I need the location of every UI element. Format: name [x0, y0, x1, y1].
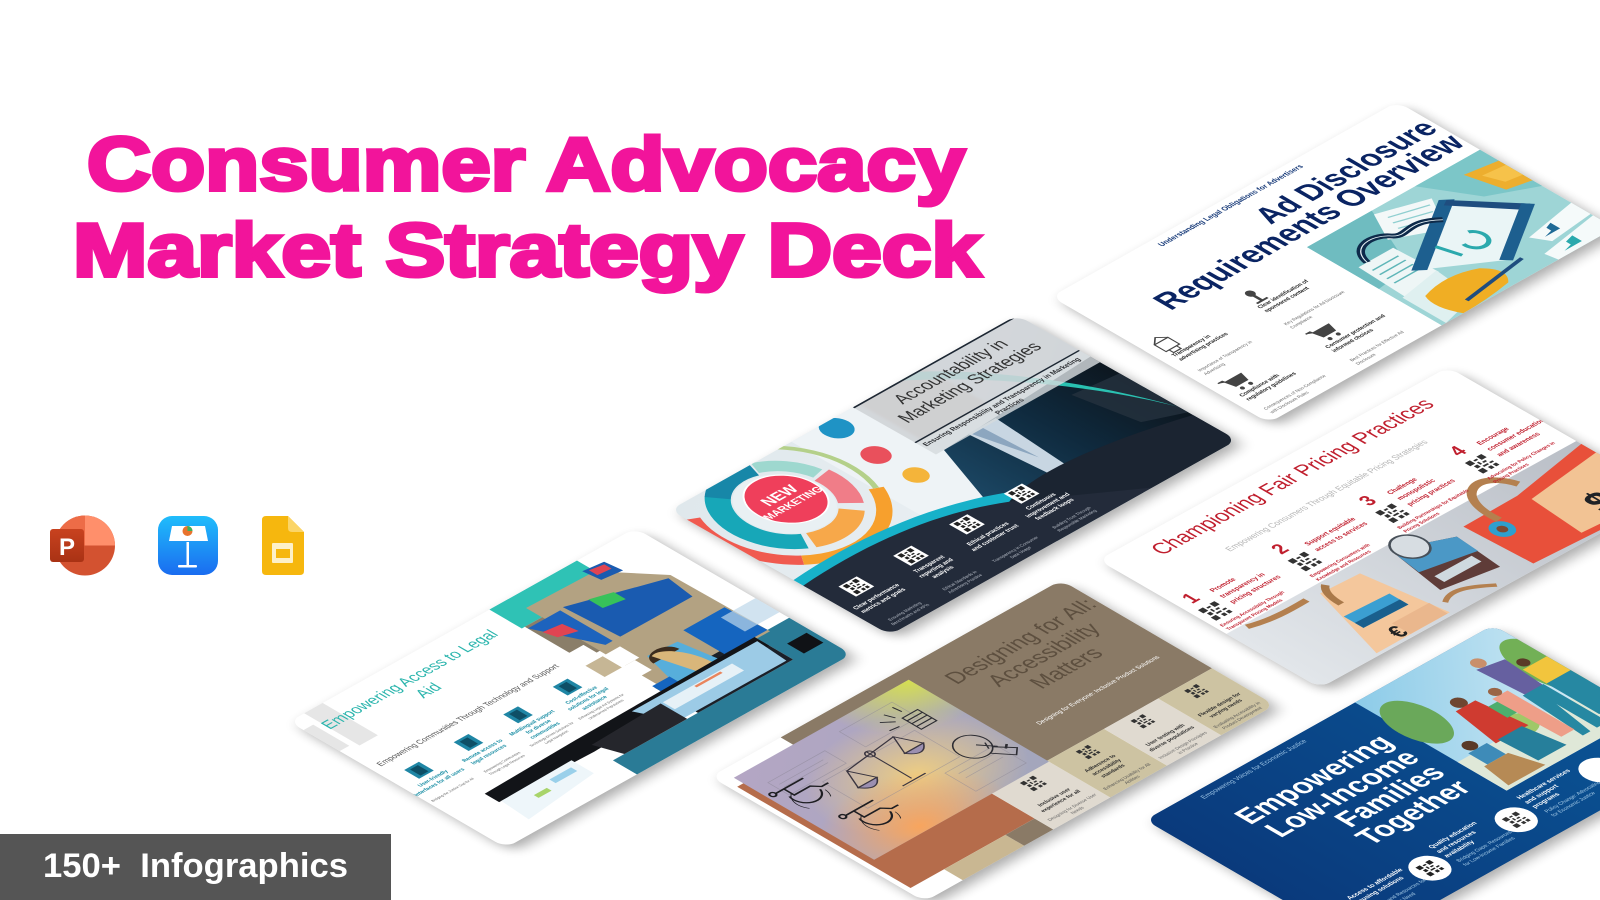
- item: multilingual: [489, 698, 580, 750]
- item: multilingual: for diverse: [525, 719, 553, 735]
- item: consumer protection: [1305, 314, 1404, 365]
- brown header block: [781, 580, 1212, 826]
- panel: Legal Aid slide: Aid: [411, 680, 446, 701]
- tile: flexible design: [1168, 675, 1268, 732]
- step 3: monopolistic: [1396, 478, 1438, 501]
- title: Accessibility: [980, 618, 1107, 690]
- tile: inclusive experience: Designing for Diverse User: [1046, 793, 1099, 822]
- item: access: Remote access to: [461, 738, 506, 763]
- item: multilingual: communities: [529, 721, 562, 740]
- item: multilingual: Multilingual support: [508, 709, 557, 737]
- item: education: and resources: [1435, 830, 1479, 854]
- illustration: families: [1351, 619, 1600, 793]
- swoosh: [900, 372, 1177, 406]
- step 1: Ensuring Accessibility Through: [1219, 590, 1287, 628]
- item: interface: User-friendly: [417, 769, 451, 788]
- photo: price tags: [1216, 435, 1600, 688]
- item: ethical practices: and customer trust: [969, 523, 1021, 552]
- navy wave footer: [794, 415, 1231, 632]
- item: interface: Bridging the Justice Gap for All: [430, 777, 475, 803]
- subtitle: Empowering Communities Through Technology and Support: [374, 662, 562, 768]
- step 2: access to services: [1313, 521, 1370, 553]
- tile: user testing: in Practice: [1177, 742, 1201, 755]
- step 4: Encourage: [1476, 426, 1512, 446]
- tile: standards: Adherence to: [1083, 754, 1119, 774]
- step 3: 3: [1354, 493, 1383, 509]
- panel: Low-Income Families slide: [1145, 619, 1600, 900]
- item: access: legal resources: [470, 744, 509, 766]
- item: sponsored: Compliance: [1289, 315, 1315, 330]
- item: sponsored: sponsored content: [1263, 286, 1311, 314]
- title: Families: [1328, 761, 1453, 832]
- icon: wheelchair: [838, 793, 917, 839]
- item: multilingual: Technology-Driven Solutions for: [529, 721, 576, 747]
- title: Accountability in: [888, 336, 1013, 407]
- tile: inclusive experience: [1002, 767, 1104, 825]
- tile: standards: [1057, 736, 1158, 794]
- item: healthcare: [1481, 765, 1600, 838]
- photo: lower monitors: [484, 632, 824, 820]
- tile: user testing: diverse populations: [1148, 725, 1197, 753]
- item: access: Through Legal Resources: [488, 754, 526, 776]
- title: Empowering: [1228, 731, 1402, 829]
- item: sponsored: [1244, 279, 1344, 328]
- item: transparent reporting: reporting and: [917, 557, 956, 579]
- item: healthcare: for Economic Justice: [1550, 791, 1598, 818]
- main title: Consumer Advocacy: [87, 122, 965, 206]
- item: transparent reporting: analysis: [930, 564, 957, 579]
- icon: scales: [831, 731, 951, 800]
- tile: inclusive experience: experience for all: [1040, 789, 1083, 814]
- item: education: for Low-Income Families: [1462, 836, 1517, 867]
- main title: [73, 122, 981, 292]
- item: performance metrics: Clear performance: [851, 582, 902, 611]
- subtitle: Designing for Everyone: Inclusive Product Solutions: [1035, 655, 1162, 726]
- item: healthcare: programs: [1531, 792, 1562, 809]
- step 2: [1272, 518, 1371, 581]
- subtitle: Ensuring Responsibility and Transparency in Marketing: [921, 356, 1083, 448]
- grey title band: Practices: [993, 397, 1026, 416]
- item: compliance: Consequences of Non-Compliance: [1262, 374, 1328, 411]
- title: Together: [1349, 776, 1479, 850]
- tile: standards: standards: [1100, 764, 1127, 779]
- item: interface: interfaces for all users: [413, 767, 467, 798]
- title: Designing for All:: [938, 595, 1103, 687]
- item: performance metrics: [838, 576, 930, 626]
- item: consumer protection: Disclosure: [1355, 353, 1378, 366]
- tile: flexible design: Product Development: [1221, 706, 1265, 730]
- item: compliance: Compliance with: [1238, 373, 1282, 398]
- step 3: Pricing Solutions: [1402, 512, 1442, 534]
- item: transparent reporting: Transparent: [912, 554, 947, 574]
- item: multilingual: Legal Navigation: [544, 730, 570, 745]
- tile: standards: accessibility: [1091, 758, 1124, 777]
- panel: Legal Aid slide: [289, 528, 859, 852]
- item: sponsored: Clear identification of: [1257, 279, 1311, 310]
- item: access: [454, 734, 525, 775]
- tile: user testing: User testing with: [1145, 723, 1188, 747]
- item: education: Bridging Gaps: Resources: [1455, 830, 1514, 863]
- grey title band: [853, 315, 1100, 454]
- item: ethical practices: Ethical practices: [965, 521, 1012, 547]
- item: housing: Access to affordable: [1345, 867, 1405, 900]
- item: continuous improvement: improvement and: [1024, 492, 1072, 519]
- item: continuous improvement: Responsible Marketing: [1056, 509, 1098, 532]
- tile: standards: Enhancing Usability for All: [1102, 762, 1153, 791]
- colour tiles: [900, 668, 1275, 880]
- title: Empowering Access to Legal: [317, 627, 503, 732]
- item: ethical practices: Data Usage: [1009, 545, 1033, 559]
- badge: infographics count: [0, 834, 391, 900]
- item: continuous improvement: [1004, 484, 1098, 532]
- item: education: [1395, 815, 1521, 887]
- tile: inclusive experience: Needs: [1069, 806, 1087, 815]
- item: transparency: Advertising: [1202, 362, 1227, 376]
- tile: flexible design: varying needs: [1208, 699, 1245, 719]
- step 1: [1183, 573, 1284, 630]
- grey title band: Marketing Strategies: [893, 339, 1046, 426]
- chart: marketing wheel: NEW: [757, 483, 803, 509]
- photo: office: [504, 535, 828, 720]
- title: [938, 595, 1148, 714]
- item: transparent reporting: Advertising Practice: [946, 573, 984, 594]
- icon: burst and bars: [870, 701, 937, 739]
- step 2: Empowering Consumers with: [1309, 543, 1372, 578]
- badge: infographics count: 150+ Infographics: [43, 847, 348, 885]
- panel: Accountability slide: [675, 318, 1246, 640]
- title: Low-Income: [1258, 746, 1428, 842]
- step 2: Support equitable: [1303, 516, 1358, 547]
- item: cost-effective: Enhancing Legal Aid Systems for: [577, 693, 626, 720]
- item: transparency: [1153, 332, 1252, 376]
- step 3: Building Partnerships for Equitable: [1396, 489, 1471, 530]
- item: education: availability: [1442, 839, 1477, 859]
- step 4: 4: [1445, 443, 1473, 460]
- item: compliance: regulatory guidelines: [1245, 372, 1298, 402]
- panel: Ad Disclosure slide: [1051, 102, 1600, 427]
- step 3: pricing practices: [1406, 478, 1458, 507]
- item: compliance: with Disclosure Rules: [1268, 390, 1312, 415]
- title: Ad Disclosure: [1246, 116, 1446, 229]
- subtitle: Empowering Voices for Economic Justice: [1199, 739, 1309, 800]
- step 1: Promote: [1209, 577, 1238, 593]
- step 1: 1: [1178, 591, 1206, 607]
- item: transparent reporting: [893, 546, 982, 594]
- step 3: Challenge: [1386, 477, 1420, 496]
- item: cost-effective: [538, 670, 631, 723]
- step 4: and awareness: [1495, 431, 1543, 458]
- checker squares: [569, 644, 652, 677]
- photo: suit: [944, 356, 1231, 541]
- step 1: transparency in: [1219, 572, 1267, 599]
- illustration: analytics artwork: [1307, 150, 1600, 325]
- tile: user testing: Inclusive Design Principles: [1157, 730, 1210, 760]
- item: education: Quality education: [1427, 821, 1479, 850]
- icons: floating chips: [818, 418, 930, 483]
- step 4: [1440, 406, 1579, 484]
- item: performance metrics: Ensuring Marketing: [887, 601, 923, 622]
- chart: marketing wheel: MARKETING: [761, 485, 827, 522]
- item: healthcare: and support: [1523, 783, 1561, 805]
- item: continuous improvement: Building Trust Through: [1051, 506, 1093, 529]
- item: continuous improvement: Continuous: [1024, 492, 1059, 511]
- item: transparent reporting: Ethical Standards in: [941, 570, 979, 591]
- item: transparency: Importance of Transparency in: [1196, 340, 1255, 373]
- terracotta block: [737, 717, 1035, 888]
- panel: Accessibility slide: [710, 580, 1282, 900]
- step 4: consumer education: [1486, 418, 1548, 452]
- tile: standards: Abilities: [1123, 774, 1143, 785]
- tile: flexible design: Flexible design for: [1197, 692, 1244, 718]
- item: consumer protection: Best Practices for Effective Ad: [1348, 330, 1406, 363]
- step 4: Pricing Practices: [1492, 463, 1531, 484]
- item: housing: [1313, 866, 1435, 900]
- step 4: Advocating for Policy Changes in: [1486, 441, 1557, 481]
- item: healthcare: Healthcare services: [1515, 768, 1573, 801]
- panel: Fair Pricing slide: [1098, 366, 1600, 692]
- title: [1228, 731, 1479, 874]
- icon: wheelchair: [768, 771, 847, 817]
- item: sponsored: Key Regulations for Ad Disclosure: [1283, 290, 1347, 326]
- icon: Google Slides: [262, 516, 304, 575]
- item: performance metrics: metrics and goals: [859, 587, 908, 614]
- step 1: pricing structures: [1228, 574, 1283, 605]
- title: Matters: [1023, 643, 1109, 692]
- illustration: gradient accessibility art: [734, 680, 1049, 860]
- photo: price tags: €: [1380, 622, 1415, 641]
- icon: light bulb: [944, 726, 1023, 771]
- blue panel: [613, 618, 846, 774]
- item: access: Empowering Communities: [483, 751, 522, 773]
- item: ethical practices: [949, 514, 1038, 562]
- item: ethical practices: Transparency in Consumer: [991, 535, 1040, 563]
- decorative grey blocks: [304, 703, 378, 751]
- item: performance metrics: Benchmarks and KPIs: [890, 602, 931, 626]
- item: consumer protection: Consumer protection and: [1324, 314, 1388, 350]
- item: interface: [404, 762, 474, 802]
- main title: Market Strategy Deck: [73, 208, 981, 292]
- icon: PowerPoint: [50, 516, 115, 576]
- icon: circle four: [1569, 753, 1600, 788]
- icon: PowerPoint: P: [59, 534, 75, 561]
- step 2: Knowledge and Resources: [1315, 550, 1373, 582]
- item: transparency: advertising practices: [1177, 332, 1230, 362]
- teal block: [489, 560, 590, 628]
- step 2: 2: [1267, 541, 1295, 557]
- tile: user testing: [1112, 704, 1215, 763]
- title: Requirements Overview: [1144, 129, 1473, 315]
- chart: marketing wheel: [686, 446, 892, 565]
- tile: inclusive experience: Inclusive user: [1037, 787, 1073, 808]
- item: transparency: Transparency in: [1171, 334, 1213, 358]
- item: cost-effective: Cost-effective: [564, 686, 600, 705]
- subtitle: Empowering Consumers Through Equitable Pricing Strategies: [1223, 438, 1431, 553]
- icon: Keynote: [158, 516, 218, 575]
- item: compliance: [1217, 372, 1326, 414]
- item: consumer protection: informed choices: [1331, 328, 1376, 353]
- item: cost-effective: assistance: [581, 695, 609, 711]
- step 3: [1350, 461, 1479, 534]
- step 1: Transparent Pricing Models: [1225, 598, 1285, 631]
- item: continuous improvement: feedback loops: [1033, 497, 1077, 521]
- item: cost-effective: solutions for legal: [566, 687, 611, 712]
- subtitle: Understanding Legal Obligations for Advertisers: [1155, 163, 1306, 248]
- item: cost-effective: Underserved Populations: [587, 699, 625, 720]
- tile: flexible design: Evaluating Accessibility in: [1212, 701, 1263, 729]
- title: Championing Fair Pricing Practices: [1145, 395, 1440, 558]
